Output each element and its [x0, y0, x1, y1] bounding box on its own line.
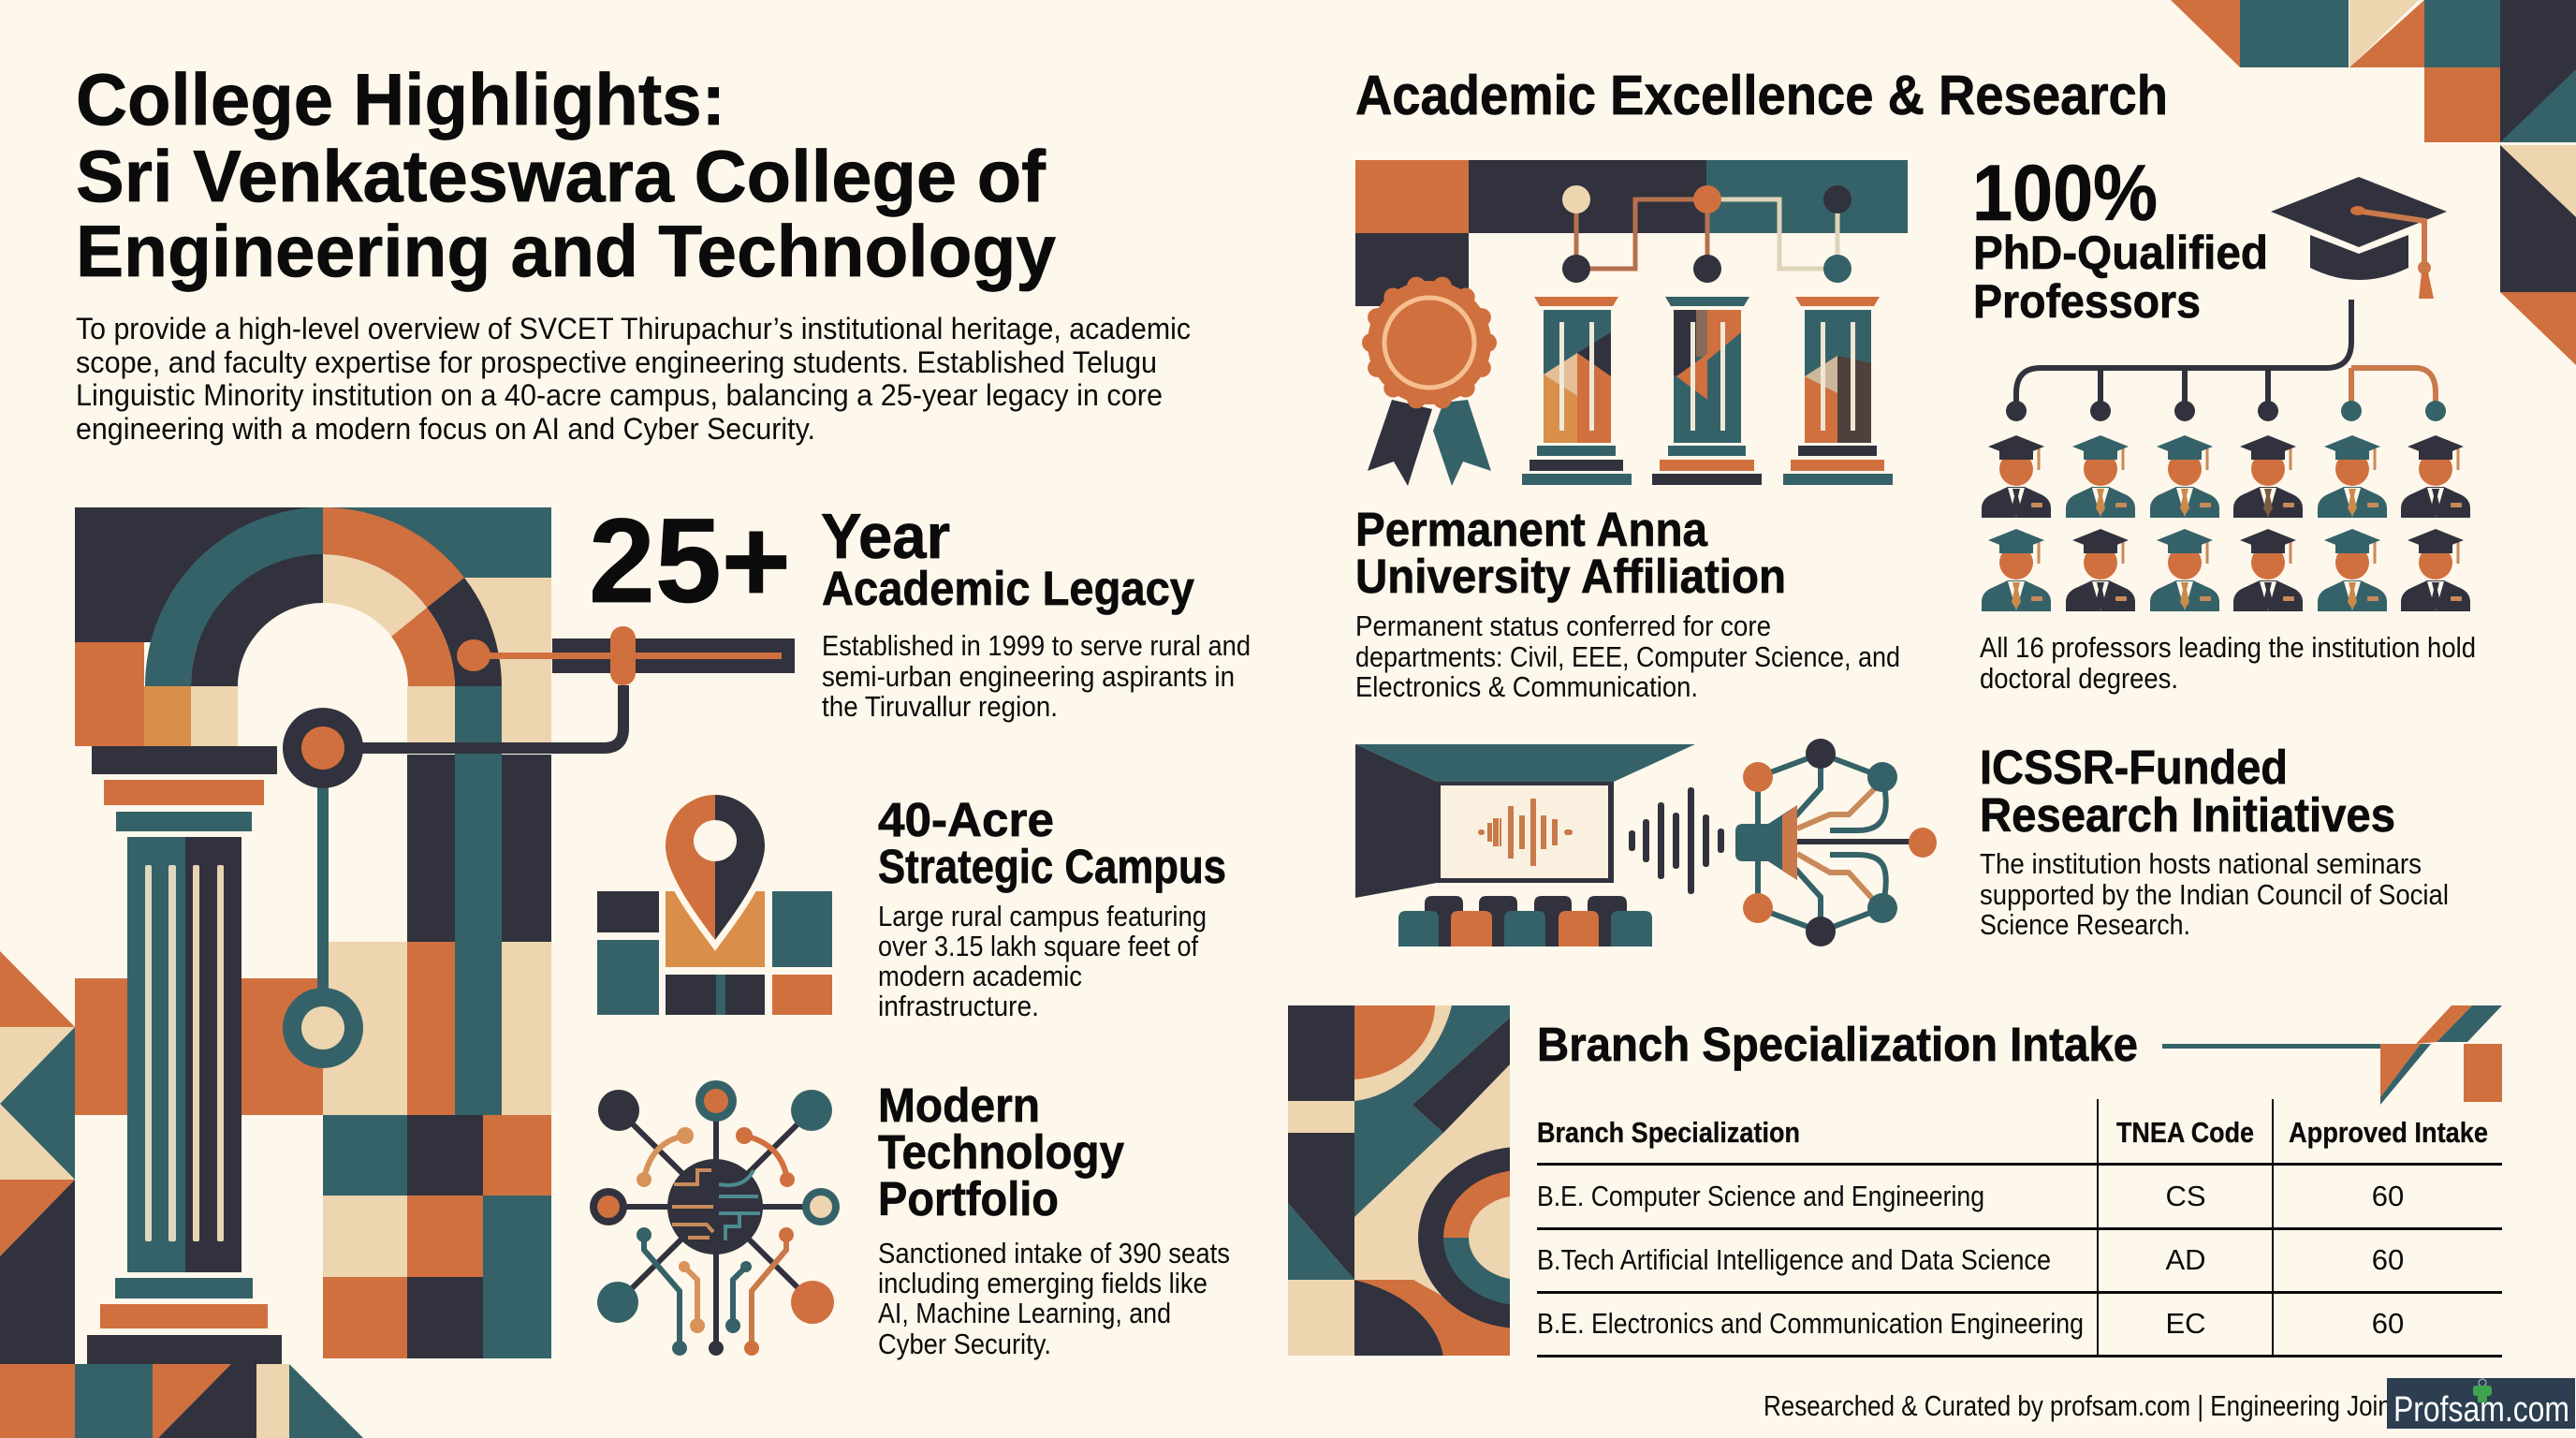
- text block: ICSSR funded research: [1980, 741, 2449, 941]
- lecture room screen: [1355, 744, 1695, 898]
- table header: [1537, 1116, 2488, 1149]
- row: CSE: B.E. Computer Science and Engineering: [1537, 1180, 1984, 1212]
- icon: small green robot: [2473, 1379, 2492, 1402]
- text block: anna university affiliation: departments: Civil, EEE, Computer Science, and: [1355, 640, 1900, 673]
- text block: 40-acre campus: over 3.15 lakh square feet of: [878, 930, 1198, 962]
- pillar three: [1783, 297, 1893, 485]
- heading: [821, 501, 1195, 615]
- org tree connector: [2006, 300, 2446, 421]
- table header: TNEA Code: [2116, 1116, 2254, 1149]
- connector bar with orange line: [360, 626, 795, 748]
- stat: 100% PhD-qualified: Professors: [1973, 275, 2201, 328]
- column capital: [92, 746, 277, 831]
- text block: anna university affiliation: [1355, 503, 1900, 703]
- text block: modern technology portfolio: Modern: [878, 1078, 1040, 1132]
- audience seats: [1398, 896, 1652, 946]
- description: [822, 629, 1251, 723]
- big number: 25+: [589, 494, 791, 628]
- text block: ICSSR funded research: supported by the Indian Council of Social: [1980, 878, 2449, 911]
- table rules: [1537, 1099, 2502, 1357]
- arch backing blocks: [75, 507, 551, 755]
- text block: modern technology portfolio: [878, 1078, 1230, 1360]
- icon: technology network: [590, 1080, 840, 1356]
- header blocks: [1355, 160, 1908, 306]
- row: AI and DS: 60: [2372, 1243, 2404, 1276]
- icon: seminar screen and speaker network: [1355, 739, 1937, 946]
- text block: ICSSR funded research: The institution hosts national seminars: [1980, 847, 2422, 880]
- decorative corner: bottom left: [0, 951, 363, 1438]
- title: Sri Venkateswara College of: [76, 135, 1046, 217]
- icons: twelve professors: [1982, 435, 2470, 611]
- footer credit: Researched & Curated by profsam.com | Engineering Joint: [1764, 1389, 2398, 1422]
- node ornaments: [283, 708, 363, 1068]
- description: Established in 1999 to serve rural and: [822, 629, 1251, 662]
- text block: anna university affiliation: Permanent status conferred for core: [1355, 609, 1771, 642]
- intro paragraph: [76, 312, 1191, 446]
- text block: modern technology portfolio: AI, Machine Learning, and: [878, 1297, 1171, 1329]
- title: College Highlights:: [76, 58, 725, 140]
- description: semi-urban engineering aspirants in: [822, 660, 1235, 693]
- text: professors caption: [1980, 631, 2476, 695]
- table heading: Branch Specialization Intake: [1537, 1018, 2138, 1071]
- column shaft: [127, 837, 242, 1272]
- speaker cone: [1735, 805, 1797, 880]
- stat: 25+ year academic legacy: [589, 494, 1251, 723]
- circuit traces: [672, 1170, 760, 1240]
- heading: Year: [821, 501, 950, 572]
- network lines: [1758, 754, 1923, 932]
- panel: abstract geometric art beside table: [1288, 1005, 1510, 1356]
- ribbon tails: [1368, 400, 1491, 486]
- row: AI and DS: [1537, 1243, 2404, 1276]
- text block: ICSSR funded research: Research Initiatives: [1980, 788, 2395, 842]
- table header: Branch Specialization: [1537, 1116, 1800, 1149]
- text block: ICSSR funded research: Science Research.: [1980, 908, 2190, 941]
- text block: 40-acre campus: Large rural campus featuring: [878, 900, 1207, 932]
- text block: modern technology portfolio: Portfolio: [878, 1172, 1059, 1225]
- row: ECE: B.E. Electronics and Communication Engineering: [1537, 1307, 2084, 1340]
- text block: modern technology portfolio: Sanctioned intake of 390 seats: [878, 1237, 1230, 1269]
- text block: anna university affiliation: Permanent Anna: [1355, 503, 1708, 556]
- text: professors caption: doctoral degrees.: [1980, 662, 2178, 695]
- connector circuit: [1562, 185, 1852, 283]
- intro paragraph: scope, and faculty expertise for prospective engineering students. Established Telugu: [76, 345, 1157, 379]
- pillar two: [1652, 297, 1762, 485]
- orange band behind shaft: [75, 978, 323, 1115]
- text: professors caption: All 16 professors leading the institution hold: [1980, 631, 2476, 664]
- text block: modern technology portfolio: Technology: [878, 1125, 1125, 1179]
- pillar one: [1522, 297, 1632, 485]
- text block: modern technology portfolio: Cyber Security.: [878, 1328, 1051, 1360]
- section heading: academic excellence: Academic Excellence & Research: [1355, 65, 2168, 126]
- table: branch specialization intake: [1537, 1099, 2502, 1357]
- row: CSE: CS: [2165, 1180, 2206, 1212]
- row: CSE: [1537, 1180, 2404, 1212]
- orange waveform: [1478, 799, 1573, 866]
- icon: affiliation medal and three pillars: [1355, 160, 1908, 486]
- text block: 40-acre campus: 40-Acre: [878, 793, 1054, 846]
- description: the Tiruvallur region.: [822, 690, 1058, 723]
- title: [76, 58, 1056, 292]
- text block: ICSSR funded research: ICSSR-Funded: [1980, 741, 2288, 794]
- intro paragraph: Linguistic Minority institution on a 40-acre campus, balancing a 25-year legacy in core: [76, 378, 1163, 412]
- icon: graduation cap: [2271, 177, 2447, 299]
- text block: modern technology portfolio: including emerging fields like: [878, 1267, 1208, 1299]
- right side blocks: [323, 755, 551, 1358]
- row: CSE: 60: [2372, 1180, 2404, 1212]
- heading: Academic Legacy: [822, 562, 1195, 615]
- text block: 40-acre campus: modern academic: [878, 960, 1082, 992]
- medal rosette: [1362, 277, 1497, 408]
- text block: anna university affiliation: University Affiliation: [1355, 550, 1786, 603]
- decorative corner: top right: [2171, 0, 2576, 365]
- intro paragraph: To provide a high-level overview of SVCET Thirupachur’s institutional heritage, academic: [76, 312, 1191, 345]
- text block: 40-acre campus: infrastructure.: [878, 990, 1039, 1022]
- text block: 40-acre campus: Strategic Campus: [878, 840, 1226, 893]
- intro paragraph: engineering with a modern focus on AI and Cyber Security.: [76, 412, 815, 446]
- network nodes: [1743, 739, 1937, 946]
- row: ECE: 60: [2372, 1307, 2404, 1340]
- row: ECE: EC: [2165, 1307, 2206, 1340]
- title: Engineering and Technology: [76, 210, 1056, 292]
- stat: 100% PhD-qualified: [1972, 149, 2268, 328]
- text block: anna university affiliation: Electronics & Communication.: [1355, 670, 1698, 703]
- column base: [87, 1278, 282, 1364]
- dark sound wave: [1629, 787, 1724, 894]
- illustration: classical pillar and arch: [75, 507, 795, 1364]
- decorative heading accent: [2162, 1005, 2502, 1105]
- text block: 40-acre campus: [878, 793, 1226, 1022]
- icon: campus map pin: [597, 795, 832, 1015]
- stat: 100% PhD-qualified: PhD-Qualified: [1973, 227, 2268, 279]
- stat: 100% PhD-qualified: 100%: [1972, 149, 2158, 237]
- table header: Approved Intake: [2289, 1116, 2488, 1149]
- row: AI and DS: AD: [2165, 1243, 2206, 1276]
- row: AI and DS: B.Tech Artificial Intelligence and Data Science: [1537, 1243, 2051, 1276]
